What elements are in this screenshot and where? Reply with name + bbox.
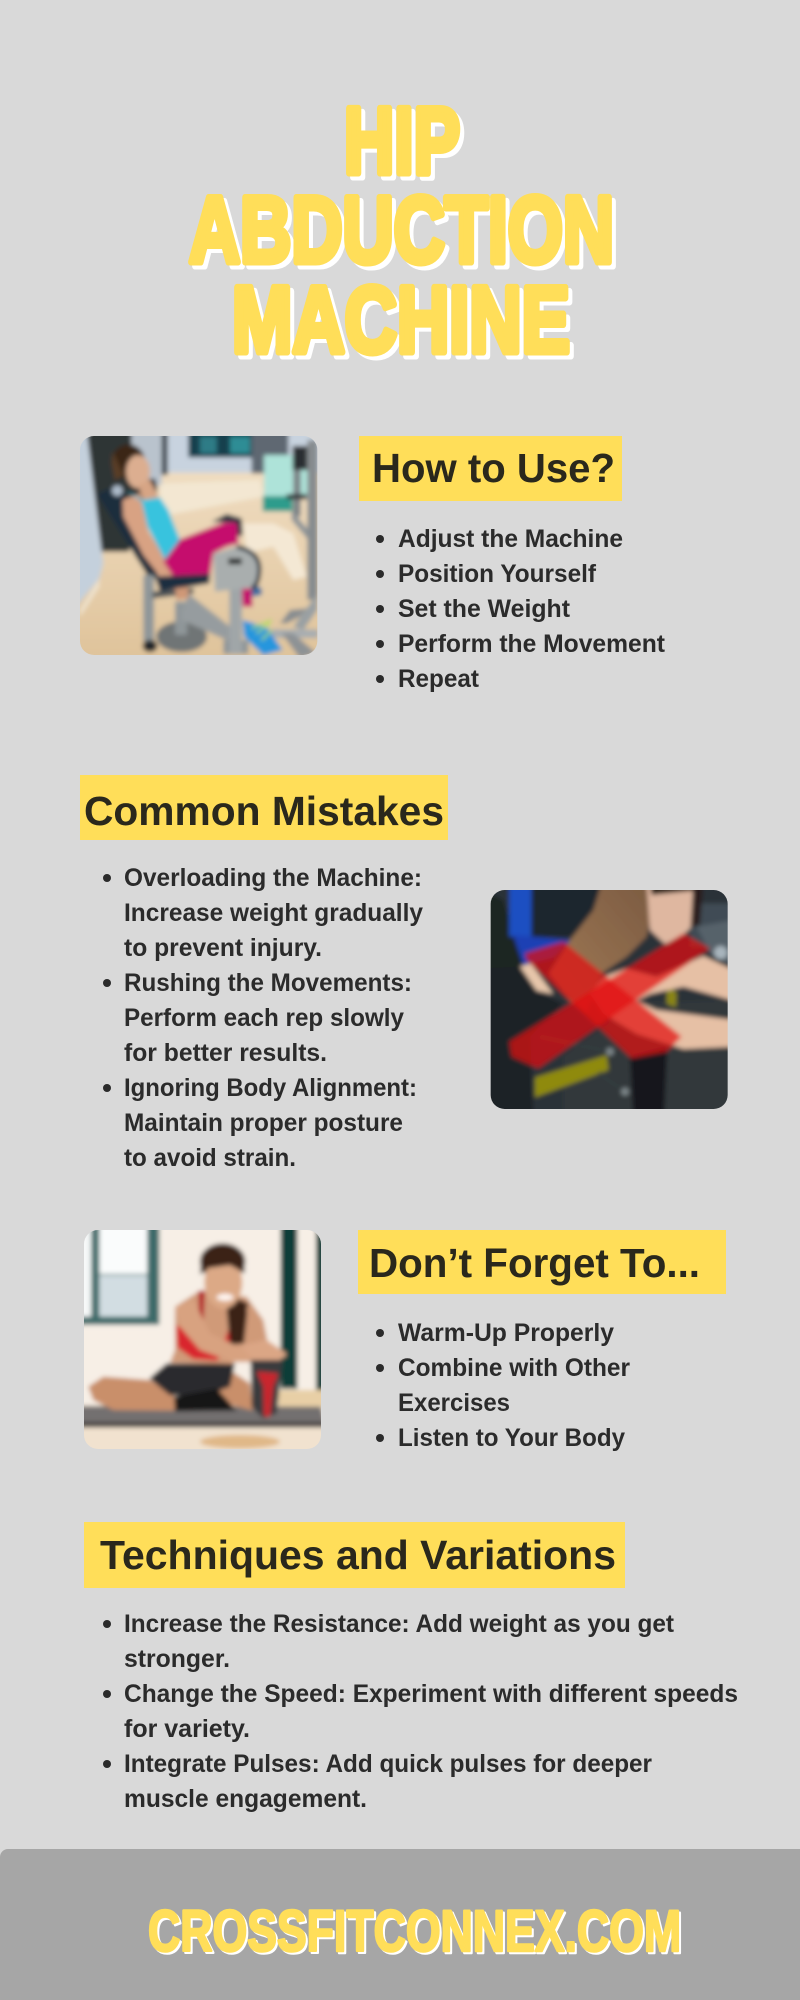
list: techniques and variations: Integrate Pulses: Add quick pulses for deeper	[124, 1750, 652, 1778]
photo: woman stretching on mat	[84, 1230, 321, 1449]
list: common mistakes: for better results.	[124, 1039, 327, 1067]
heading: common mistakes: Common Mistakes	[84, 788, 444, 834]
title: HIP	[344, 88, 460, 193]
title	[189, 88, 618, 376]
heading: techniques and variations: Techniques and Variations	[100, 1532, 616, 1578]
heading: how to use	[359, 436, 622, 501]
list: common mistakes: to avoid strain.	[124, 1144, 296, 1172]
list: common mistakes: Perform each rep slowly	[124, 1004, 404, 1032]
heading: how to use: How to Use?	[372, 445, 615, 491]
list: don't forget to: Listen to Your Body	[398, 1424, 625, 1452]
list: how to use steps: Position Yourself	[398, 560, 597, 588]
title: ABDUCTION	[189, 177, 614, 282]
list: how to use steps: Set the Weight	[398, 595, 571, 623]
footer band	[0, 1849, 800, 2000]
list: how to use steps: Repeat	[398, 665, 480, 693]
photo: woman on machine crossed out with red X	[490, 890, 728, 1109]
heading: common mistakes	[80, 775, 448, 840]
photo: woman seated on hip abduction machine	[73, 430, 323, 659]
list: techniques and variations: for variety.	[124, 1715, 250, 1743]
list: how to use steps: Perform the Movement	[398, 630, 666, 658]
list: common mistakes: Maintain proper posture	[124, 1109, 403, 1137]
list: techniques and variations: Increase the Resistance: Add weight as you get	[124, 1610, 675, 1638]
heading: don't forget to: Don’t Forget To...	[369, 1240, 700, 1286]
title: MACHINE	[236, 271, 574, 376]
list: common mistakes: Increase weight gradually	[124, 899, 423, 927]
list: common mistakes: Overloading the Machine:	[124, 864, 422, 892]
list: techniques and variations: muscle engagement.	[124, 1785, 367, 1813]
list: techniques and variations: stronger.	[124, 1645, 230, 1673]
list: don't forget to: Exercises	[398, 1389, 510, 1417]
title: HIP	[348, 92, 464, 197]
list: common mistakes: to prevent injury.	[124, 934, 322, 962]
list: common mistakes	[103, 864, 423, 1172]
list: common mistakes: Rushing the Movements:	[124, 969, 412, 997]
list: techniques and variations: Change the Speed: Experiment with different speeds	[124, 1680, 738, 1708]
list: don't forget to	[376, 1319, 630, 1452]
list: techniques and variations	[103, 1610, 738, 1813]
list: don't forget to: Combine with Other	[398, 1354, 630, 1382]
list: how to use steps	[376, 525, 666, 693]
title: MACHINE	[232, 267, 570, 372]
list: how to use steps: Adjust the Machine	[398, 525, 623, 553]
list: don't forget to: Warm-Up Properly	[398, 1319, 614, 1347]
heading: techniques and variations	[84, 1522, 625, 1588]
title: ABDUCTION	[193, 181, 618, 286]
list: common mistakes: Ignoring Body Alignment:	[124, 1074, 417, 1102]
heading: don't forget to	[358, 1230, 726, 1294]
